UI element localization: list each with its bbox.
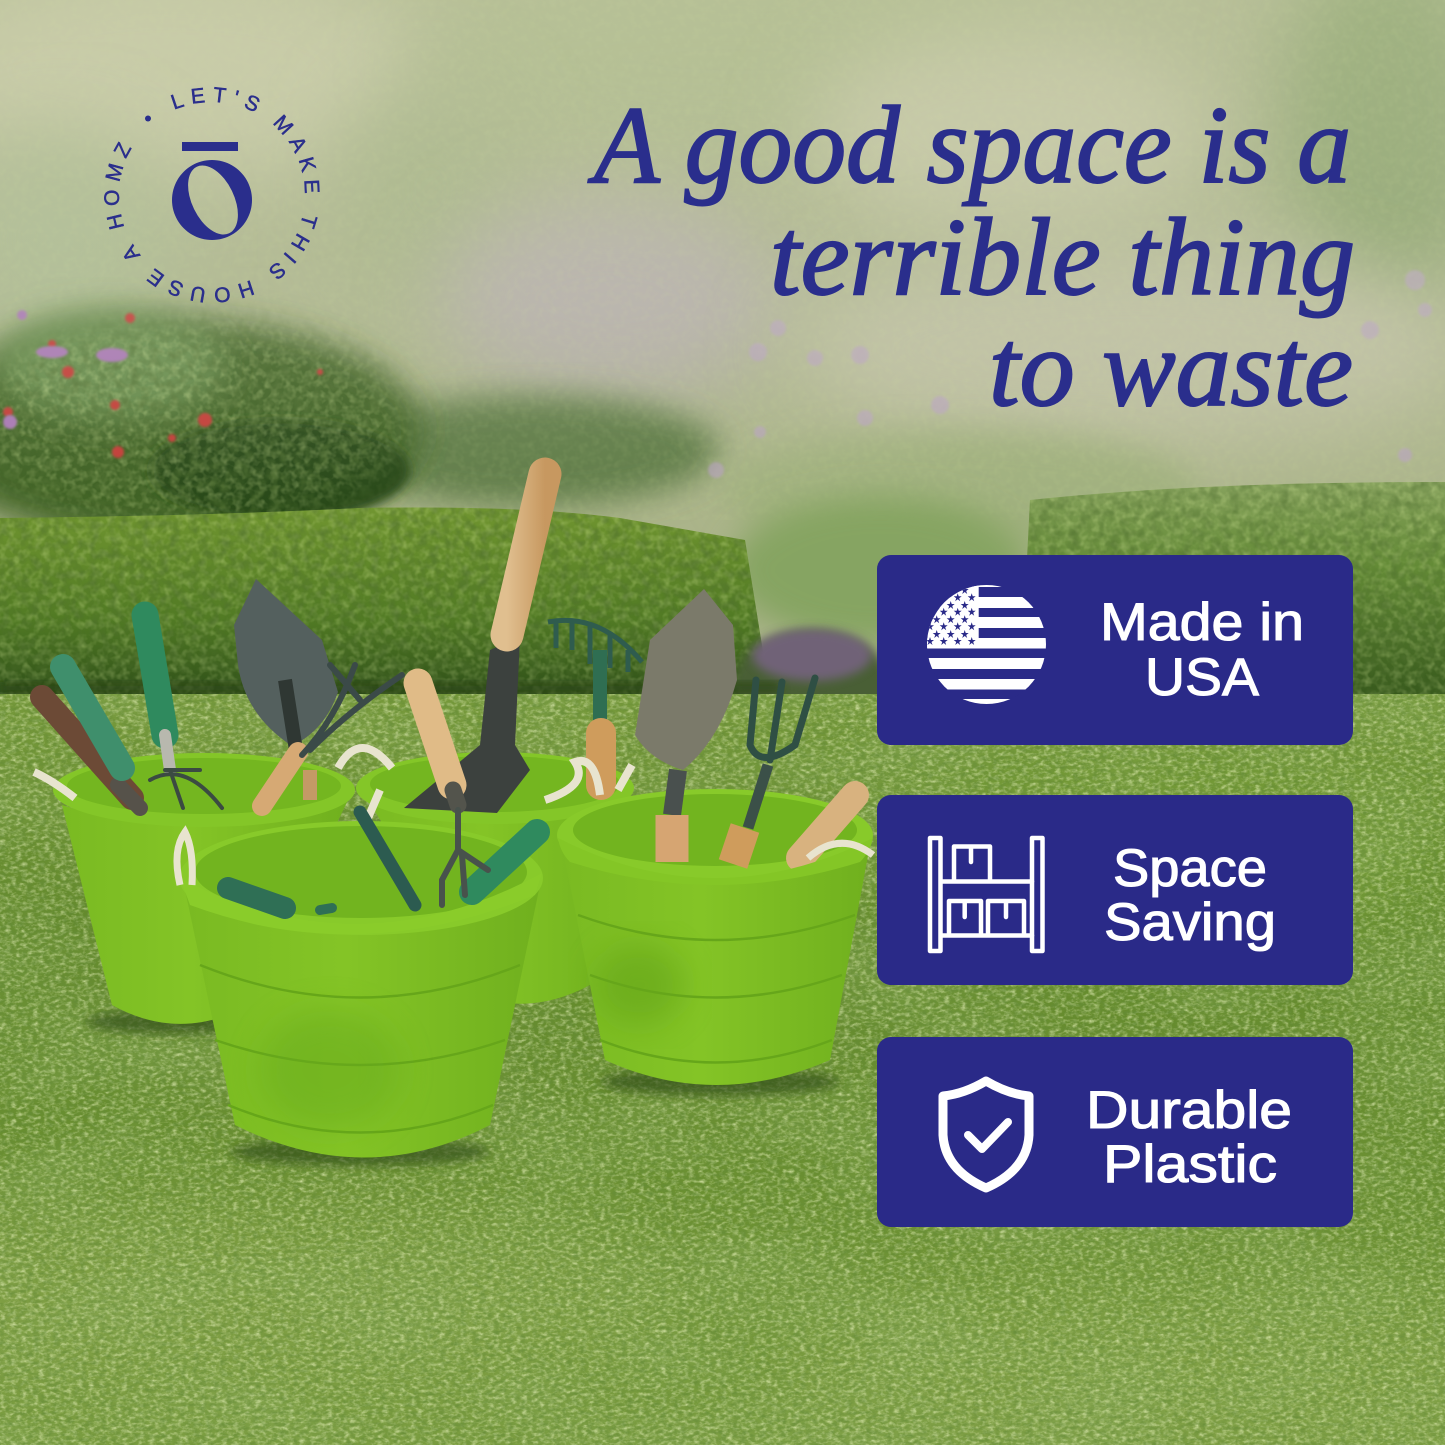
misty background foliage	[0, 0, 1445, 700]
icon: US flag circle	[926, 584, 1047, 705]
label: Durable Plastic: Durable	[1086, 1081, 1292, 1140]
tool: wood handle right	[800, 795, 855, 858]
title: A good space is a	[587, 84, 1351, 206]
logo badge	[104, 86, 320, 303]
label: Space Saving: Space	[1113, 839, 1267, 898]
tool: brown handle trowel	[42, 697, 140, 808]
tool: wooden handle fork in middle	[418, 683, 458, 805]
buckets and tools group	[34, 474, 873, 1158]
icon: shield with check	[943, 1081, 1029, 1188]
panel: Made in USA	[877, 555, 1353, 745]
tool: cultivator	[302, 665, 402, 755]
bucket: back left	[53, 753, 355, 1024]
bucket: right	[557, 789, 873, 1085]
title: to waste	[989, 307, 1353, 429]
label: Space Saving	[1104, 839, 1276, 952]
label: Made in USA	[1100, 593, 1304, 707]
tool: grey shovel left	[234, 579, 338, 806]
bucket rim fronts	[558, 838, 873, 885]
label: Made in USA: USA	[1145, 648, 1260, 707]
circular slogan: LET'S MAKE THIS HOUSE A HOMZ	[104, 86, 320, 303]
lawn	[0, 694, 1445, 1445]
title	[587, 84, 1355, 429]
label: Made in USA: Made in	[1100, 593, 1304, 652]
tool: green handled fork	[145, 615, 222, 808]
logo mark: o	[172, 160, 252, 240]
tool: fork right	[733, 678, 815, 864]
right flowers	[708, 270, 1432, 478]
purple flower bed	[734, 629, 890, 740]
tool: grey shovel right	[635, 589, 737, 862]
top fog overlay	[0, 0, 1445, 520]
panel: Durable Plastic	[877, 1037, 1353, 1227]
label: Durable Plastic: Plastic	[1103, 1135, 1277, 1194]
right hedge	[1020, 482, 1445, 696]
bucket shadows on grass	[85, 1010, 840, 1166]
label: Durable Plastic	[1086, 1081, 1292, 1194]
tool: teal handle	[63, 667, 122, 768]
title: terrible thing	[770, 196, 1355, 318]
tool: big trowel	[404, 474, 545, 813]
slogan dot	[145, 116, 151, 122]
left hedge	[0, 507, 770, 695]
label: Space Saving: Saving	[1104, 893, 1276, 952]
bucket: back middle	[356, 752, 634, 1004]
tool: small rake	[548, 620, 642, 785]
flower bush left	[0, 290, 438, 518]
hedge texture	[0, 480, 1445, 696]
icon: storage shelf with boxes	[930, 838, 1042, 951]
foliage in mid right	[730, 495, 1030, 645]
tools inside front bucket	[228, 810, 537, 910]
panel: Space Saving	[877, 795, 1353, 985]
logo mark: bar	[182, 142, 238, 151]
bucket: front	[177, 821, 543, 1158]
rope handles	[34, 748, 632, 818]
